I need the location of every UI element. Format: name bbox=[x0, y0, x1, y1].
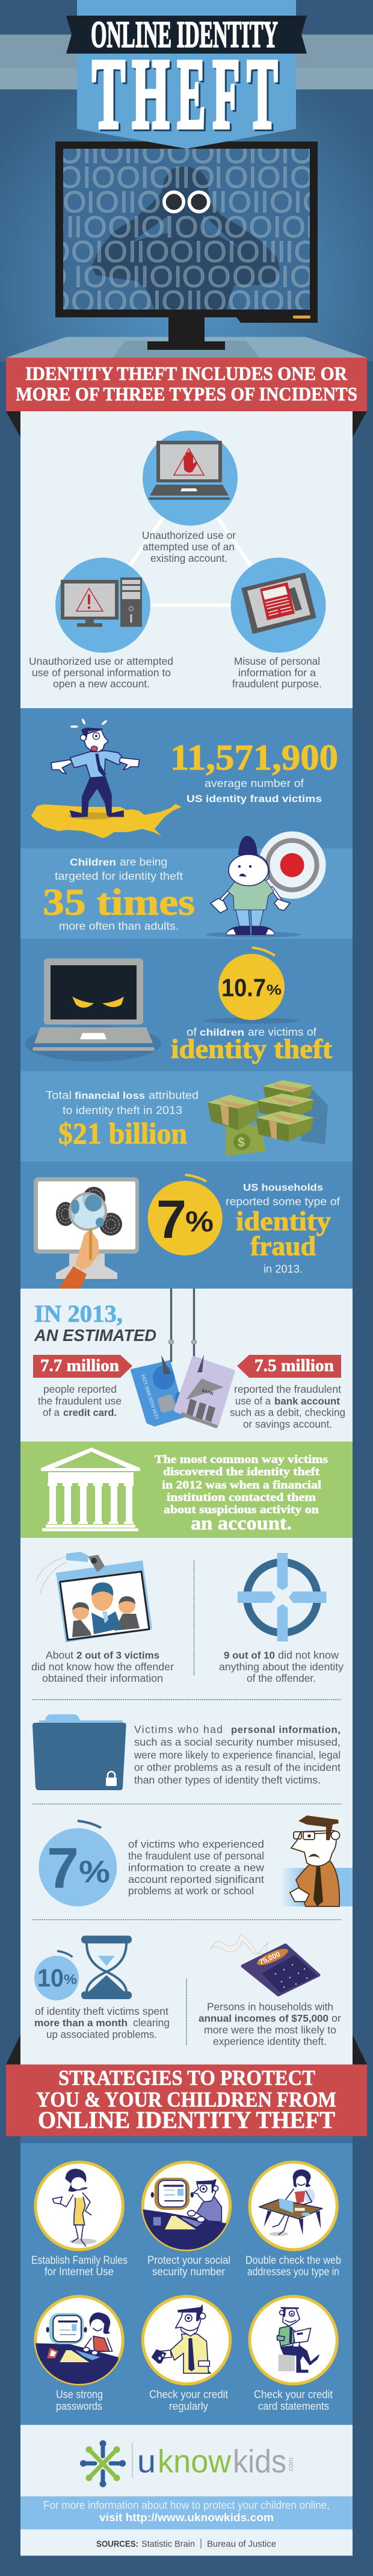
caption: social security number: Protect your social bbox=[147, 2254, 230, 2266]
binary code: OOIOOIOIIOOIOIO bbox=[46, 284, 318, 318]
map of US bbox=[31, 804, 182, 838]
caption: an account. bbox=[191, 1512, 292, 1534]
caption: are being bbox=[120, 856, 167, 868]
caption: bank account: such as a debit, checking bbox=[230, 1407, 345, 1419]
caption: are victims of bbox=[248, 1026, 317, 1038]
caption: 9 out of 10: did not know bbox=[278, 1649, 339, 1661]
icon: monitor with fingerprints bbox=[34, 1177, 139, 1289]
tag: 7.7 million: 7.7 million bbox=[40, 1357, 119, 1375]
caption: misuse: information for a bbox=[238, 667, 316, 679]
ribbon bbox=[66, 14, 307, 55]
caption: new account bbox=[29, 655, 173, 690]
caption bbox=[186, 1026, 317, 1038]
caption: Children bbox=[70, 856, 116, 868]
icon: money: $ bbox=[238, 1136, 245, 1150]
caption: 2 out of 3: obtained their information bbox=[42, 1672, 163, 1684]
stat circle: 10%: % bbox=[64, 1971, 77, 1987]
section banner: strategies: ONLINE IDENTITY THEFT bbox=[38, 2106, 335, 2133]
caption: in 2012 was when a financial bbox=[162, 1479, 321, 1492]
text: personal information: or other problems as a result of the incident bbox=[134, 1761, 341, 1773]
text: personal information: personal information, bbox=[231, 1725, 341, 1735]
caption: 9 out of 10 bbox=[219, 1649, 344, 1684]
number: 11,571,900 bbox=[170, 738, 338, 777]
panel: three incident types bbox=[20, 411, 353, 708]
sources: SOURCES: bbox=[96, 2539, 138, 2549]
caption: annual incomes: or bbox=[331, 2012, 341, 2024]
text: work or school: of victims who experienced bbox=[128, 1838, 264, 1850]
caption: annual incomes: annual incomes of $75,000 bbox=[199, 2014, 328, 2024]
binary code bbox=[63, 149, 310, 310]
icon: laptop with evil eyes bbox=[25, 959, 161, 1062]
panel: children targeted bbox=[20, 832, 353, 939]
stat circle: 7%: 7 bbox=[47, 1836, 79, 1900]
icon: target bbox=[259, 832, 326, 899]
icon: tablet with news article bbox=[231, 558, 326, 653]
caption: strong passwords: Use strong bbox=[56, 2389, 103, 2401]
number: $21 billion bbox=[58, 1116, 187, 1150]
binary code: OIIOIIOOOIOIOIO bbox=[58, 136, 313, 170]
stat circle: % bbox=[185, 1206, 214, 1238]
tag: 7.5 million: 7.5 million bbox=[254, 1357, 334, 1375]
caption: more than a month: clearing bbox=[133, 2017, 170, 2029]
caption: identity bbox=[236, 1206, 331, 1236]
icon: locked folder bbox=[32, 1714, 126, 1790]
caption: more than a month: up associated problems. bbox=[46, 2028, 157, 2040]
icon: hooked cards bbox=[132, 1289, 233, 1428]
caption: existing account: attempted use of an bbox=[143, 541, 235, 553]
cartoon man bbox=[51, 718, 140, 817]
stat circle: 10.7 bbox=[221, 973, 266, 1002]
desk bbox=[6, 337, 367, 358]
title line 2 bbox=[92, 39, 278, 149]
caption: existing account bbox=[142, 529, 236, 564]
binary code: OIOOIOIIOIOIOIO bbox=[58, 160, 313, 194]
icon: calculator bbox=[211, 1934, 319, 1995]
caption: misuse: Misuse of personal bbox=[234, 655, 320, 667]
stat circle: 7% bbox=[39, 1821, 117, 1906]
caption: credit card: the fraudulent use bbox=[38, 1395, 122, 1407]
caption bbox=[186, 777, 322, 804]
caption: Total bbox=[46, 1089, 72, 1101]
caption: check credit: regularly bbox=[169, 2400, 208, 2412]
caption: 9 out of 10: anything about the identity bbox=[219, 1661, 344, 1673]
caption: of bbox=[186, 1026, 197, 1038]
caption: annual incomes: more were the most likely to bbox=[204, 2024, 336, 2036]
caption: financial loss bbox=[75, 1090, 145, 1101]
main column background bbox=[20, 411, 353, 2556]
strategy: family rules bbox=[35, 2162, 123, 2250]
icon: desktop with warning bbox=[55, 558, 150, 653]
icon: calculator: 75,000 bbox=[258, 1950, 282, 1967]
eyes bbox=[164, 192, 209, 211]
binary code: OIOOIIOIOOOOIO bbox=[43, 260, 313, 294]
panel: logo bbox=[20, 2425, 353, 2497]
caption: bank account: bank account bbox=[274, 1396, 341, 1407]
caption: children bbox=[200, 1027, 244, 1038]
caption: 2 out of 3: did not know how the offender bbox=[31, 1661, 174, 1673]
caption: about suspicious activity on bbox=[164, 1504, 319, 1516]
caption: strong passwords bbox=[56, 2389, 103, 2412]
caption: credit card statements bbox=[254, 2389, 333, 2412]
logo wordmark: .com bbox=[286, 2457, 295, 2473]
icon: temple bbox=[41, 1448, 140, 1531]
caption: more than a month bbox=[34, 2005, 170, 2040]
icon: hooked cards: BANK bbox=[201, 1388, 215, 1396]
caption: institution contacted them bbox=[167, 1491, 316, 1504]
caption: social security number: security number bbox=[152, 2266, 225, 2278]
caption: new account: use of personal information to bbox=[32, 667, 171, 679]
panel: in 2013 estimated bbox=[20, 1289, 353, 1442]
caption: to identity theft in 2013 bbox=[63, 1104, 182, 1116]
text: personal information: were more likely to experience financial, legal bbox=[134, 1749, 341, 1761]
sources bbox=[20, 2530, 353, 2556]
logo wordmark: know bbox=[158, 2444, 232, 2480]
cartoon child bbox=[206, 836, 301, 938]
icon: laptop with stop hand bbox=[143, 431, 238, 526]
section banner: strategies: YOU & YOUR CHILDREN FROM bbox=[36, 2087, 336, 2111]
text: personal information: than other types of identity theft victims. bbox=[134, 1774, 321, 1786]
caption: 2 out of 3: 2 out of 3 victims bbox=[76, 1650, 159, 1661]
caption: check credit bbox=[149, 2389, 228, 2412]
caption: 2 out of 3: About bbox=[46, 1649, 73, 1661]
stat circle bbox=[204, 948, 299, 1024]
strategy: social security number bbox=[143, 2162, 230, 2251]
sources: Statistic Brain bbox=[141, 2539, 195, 2549]
caption: US households bbox=[243, 1182, 323, 1193]
caption: new account: Unauthorized use or attempted bbox=[29, 655, 173, 667]
caption: bank account: use of a bbox=[235, 1395, 271, 1407]
sources: Bureau of Justice bbox=[207, 2539, 276, 2549]
stat circle: 10%: 10 bbox=[37, 1964, 64, 1992]
caption: annual incomes: experience identity theft. bbox=[213, 2035, 327, 2047]
stat circle: 10% bbox=[34, 1951, 79, 2000]
text: work or school: problems at work or school bbox=[128, 1885, 254, 1897]
text: work or school: the fraudulent use of personal bbox=[128, 1850, 264, 1862]
binary code: OIOIIOIIOIIOIO bbox=[63, 185, 326, 219]
caption: misuse: fraudulent purpose. bbox=[232, 678, 322, 690]
caption: bank account: reported the fraudulent bbox=[234, 1383, 341, 1395]
icon: hourglass bbox=[81, 1935, 132, 1999]
caption: new account: open a new account. bbox=[53, 678, 150, 690]
panel: financial loss bbox=[20, 1071, 353, 1162]
icon: ID photo bbox=[36, 1552, 152, 1643]
strategy: check credit bbox=[143, 2297, 230, 2384]
caption: fraud bbox=[250, 1231, 316, 1262]
caption: existing account: existing account. bbox=[150, 552, 227, 564]
stat circle bbox=[148, 1175, 223, 1255]
binary code: OIIOOIOIOOOOIOI bbox=[42, 210, 314, 244]
band: more information: visit http://www.uknowkids.com bbox=[99, 2512, 274, 2524]
panel: children victims bbox=[20, 939, 353, 1071]
heading: AN ESTIMATED bbox=[34, 1326, 156, 1345]
caption: web addresses: addresses you type in bbox=[247, 2266, 339, 2278]
banner bbox=[77, 0, 296, 149]
title line 2: H bbox=[132, 39, 170, 149]
binary code: OOIOIIOOIOIOIIIIO bbox=[46, 235, 318, 269]
hooded figure bbox=[91, 166, 280, 310]
caption: The most common way victims bbox=[155, 1454, 328, 1466]
panel: households bbox=[20, 1162, 353, 1289]
band: more information bbox=[20, 2497, 353, 2530]
section banner: three types: IDENTITY THEFT INCLUDES ONE OR bbox=[25, 362, 348, 384]
section banner: strategies bbox=[6, 2035, 367, 2136]
caption: more often than adults. bbox=[59, 920, 179, 932]
text: work or school bbox=[128, 1838, 264, 1897]
section banner: strategies: STRATEGIES TO PROTECT bbox=[58, 2065, 315, 2089]
cartoon man with glasses bbox=[280, 1815, 353, 1906]
caption: family rules: for Internet Use bbox=[45, 2266, 114, 2278]
caption: targeted for identity theft bbox=[55, 870, 183, 882]
caption: credit card bbox=[38, 1383, 122, 1419]
title line 2: F bbox=[213, 39, 239, 149]
icon: money bbox=[208, 1080, 328, 1156]
icon: crosshair bbox=[238, 1553, 326, 1641]
monitor bbox=[55, 142, 318, 350]
caption: family rules: Establish Family Rules bbox=[31, 2254, 128, 2266]
caption: average number of bbox=[205, 777, 304, 789]
band: more information: For more information about how to protect your children online, bbox=[43, 2500, 330, 2512]
logo wordmark: kids bbox=[233, 2444, 286, 2480]
caption: more than a month: of identity theft victims spent bbox=[35, 2005, 168, 2017]
caption: bank account bbox=[230, 1383, 345, 1430]
caption bbox=[46, 1089, 199, 1116]
tag: 7.7 million bbox=[33, 1355, 132, 1378]
caption: web addresses: Double check the web bbox=[245, 2254, 341, 2266]
caption: family rules bbox=[31, 2254, 128, 2278]
caption: more than a month: more than a month bbox=[34, 2018, 128, 2029]
number: 35 times bbox=[43, 882, 195, 923]
caption bbox=[226, 1182, 341, 1275]
caption: web addresses bbox=[245, 2254, 341, 2278]
strategy: credit card statements bbox=[250, 2297, 337, 2384]
caption: social security number bbox=[147, 2254, 230, 2278]
stat circle: 7 bbox=[156, 1190, 186, 1250]
caption bbox=[155, 1454, 328, 1534]
caption: credit card statements: card statements bbox=[258, 2400, 329, 2412]
caption: attributed bbox=[149, 1089, 199, 1101]
stat circle: % bbox=[267, 982, 282, 998]
heading bbox=[34, 1300, 156, 1345]
caption bbox=[55, 856, 183, 882]
panel: strategies background bbox=[20, 2136, 353, 2425]
section banner: three types bbox=[6, 358, 367, 437]
highlight: identity theft bbox=[171, 1034, 332, 1064]
caption: 9 out of 10: 9 out of 10 bbox=[224, 1650, 275, 1661]
caption: bank account: or savings account. bbox=[243, 1418, 332, 1430]
text: personal information: such as a social security number misused, bbox=[134, 1736, 341, 1748]
caption: misuse bbox=[232, 655, 322, 690]
icon: logo mark bbox=[80, 2440, 126, 2487]
text: personal information bbox=[134, 1723, 341, 1786]
title line 2: E bbox=[177, 39, 206, 149]
logo wordmark: u bbox=[137, 2444, 156, 2480]
stat circle: 7%: % bbox=[79, 1855, 110, 1890]
caption: credit card statements: Check your credit bbox=[254, 2389, 333, 2401]
caption: US identity fraud victims bbox=[186, 793, 322, 804]
caption: credit card: of a bbox=[43, 1407, 60, 1419]
logo wordmark bbox=[137, 2444, 295, 2480]
panel: financial institution bbox=[20, 1442, 353, 1538]
caption: reported some type of bbox=[226, 1196, 341, 1208]
caption: credit card: people reported bbox=[43, 1383, 117, 1395]
caption: annual incomes bbox=[199, 2000, 341, 2047]
caption: credit card: credit card. bbox=[63, 1408, 117, 1419]
text: work or school: information to create a new bbox=[128, 1862, 264, 1874]
icon: hooked cards: 1234 0020 0000 1234 bbox=[140, 1374, 160, 1420]
panel: fraud victims stat bbox=[20, 708, 353, 848]
caption: 9 out of 10: of the offender. bbox=[247, 1672, 316, 1684]
title line 2: T bbox=[92, 39, 125, 149]
tag: 7.5 million bbox=[237, 1355, 341, 1378]
strategy: web addresses bbox=[250, 2162, 337, 2250]
header: T bbox=[247, 39, 278, 149]
caption: 2 out of 3 bbox=[31, 1649, 174, 1684]
strategy: strong passwords bbox=[34, 2297, 123, 2385]
text: work or school: account reported significant bbox=[128, 1873, 264, 1885]
caption: discovered the identity theft bbox=[163, 1466, 320, 1478]
text: personal information: Victims who had bbox=[134, 1723, 223, 1735]
caption: strong passwords: passwords bbox=[56, 2400, 102, 2412]
panel: victim facts bbox=[20, 1538, 353, 2064]
caption: annual incomes: Persons in households with bbox=[207, 2000, 333, 2012]
heading: IN 2013, bbox=[34, 1300, 123, 1327]
caption: check credit: Check your credit bbox=[149, 2389, 228, 2401]
caption: existing account: Unauthorized use or bbox=[142, 529, 236, 541]
header bbox=[0, 0, 373, 361]
caption: in 2013. bbox=[264, 1263, 303, 1275]
